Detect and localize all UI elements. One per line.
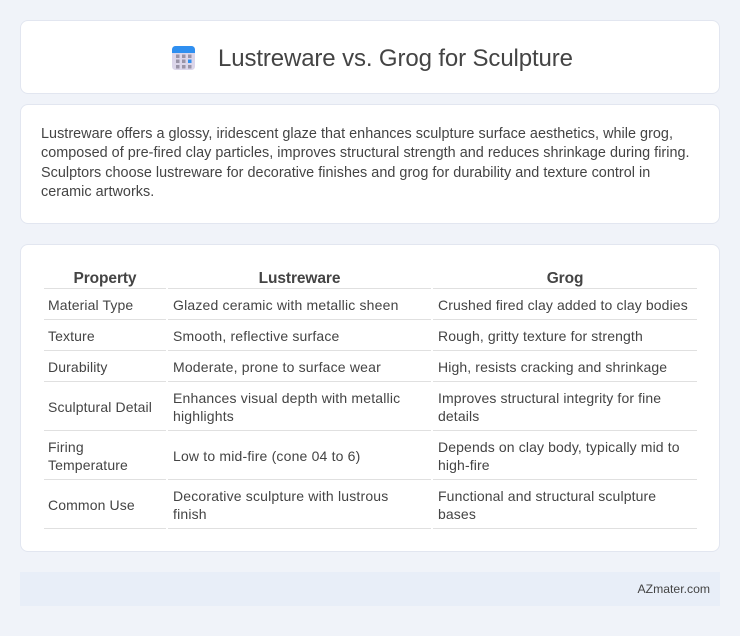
row: material type xyxy=(48,297,688,313)
row: sculptural detail xyxy=(48,390,661,424)
row: durability: Durability xyxy=(48,359,108,375)
row: sculptural detail: Improves structural integrity for fine xyxy=(438,390,661,406)
icon: calendar xyxy=(172,46,195,70)
row: sculptural detail: highlights xyxy=(173,408,234,424)
description text: ceramic artworks. xyxy=(41,184,154,200)
row: common use: finish xyxy=(173,506,207,522)
row: durability: High, resists cracking and shrinkage xyxy=(438,359,667,375)
row: texture xyxy=(48,328,643,344)
row: texture: Smooth, reflective surface xyxy=(173,328,340,344)
row: firing temperature xyxy=(48,439,680,473)
description text: Sculptors choose lustreware for decorative finishes and grog for durability and texture control in xyxy=(41,165,650,181)
row: firing temperature: Depends on clay body, typically mid to xyxy=(438,439,680,455)
table header xyxy=(74,270,583,287)
row: firing temperature: Temperature xyxy=(48,457,128,473)
table header: Property xyxy=(74,270,136,287)
row: common use: Decorative sculpture with lustrous xyxy=(173,488,388,504)
title panel xyxy=(20,20,720,94)
row: texture: Rough, gritty texture for strength xyxy=(438,328,643,344)
row: material type: Crushed fired clay added to clay bodies xyxy=(438,297,688,313)
row: texture: Texture xyxy=(48,328,95,344)
panel: comparison table xyxy=(20,244,720,552)
footer credit: AZmater.com xyxy=(638,582,710,596)
description text xyxy=(41,126,690,200)
description text: Lustreware offers a glossy, iridescent glaze that enhances sculpture surface aesthetics, while grog, xyxy=(41,126,673,142)
row: common use: bases xyxy=(438,506,476,522)
row: common use: Functional and structural sculpture xyxy=(438,488,656,504)
row: material type: Material Type xyxy=(48,297,133,313)
row: sculptural detail: details xyxy=(438,408,479,424)
row: durability xyxy=(48,359,667,375)
row: sculptural detail: Enhances visual depth with metallic xyxy=(173,390,400,406)
row: material type: Glazed ceramic with metallic sheen xyxy=(173,297,399,313)
panel: description xyxy=(20,104,720,224)
table header: Grog xyxy=(547,270,583,287)
row: common use: Common Use xyxy=(48,497,135,513)
row: common use xyxy=(48,488,656,522)
description text: composed of pre-fired clay particles, improves structural strength and reduces shrinkage during firing. xyxy=(41,145,690,161)
row: firing temperature: Low to mid-fire (cone 04 to 6) xyxy=(173,448,360,464)
row: sculptural detail: Sculptural Detail xyxy=(48,399,152,415)
row: durability: Moderate, prone to surface wear xyxy=(173,359,381,375)
row: firing temperature: Firing xyxy=(48,439,84,455)
title: Lustreware vs. Grog for Sculpture xyxy=(218,45,573,72)
table header: Lustreware xyxy=(259,270,340,287)
footer bar xyxy=(20,572,720,606)
row: firing temperature: high-fire xyxy=(438,457,490,473)
